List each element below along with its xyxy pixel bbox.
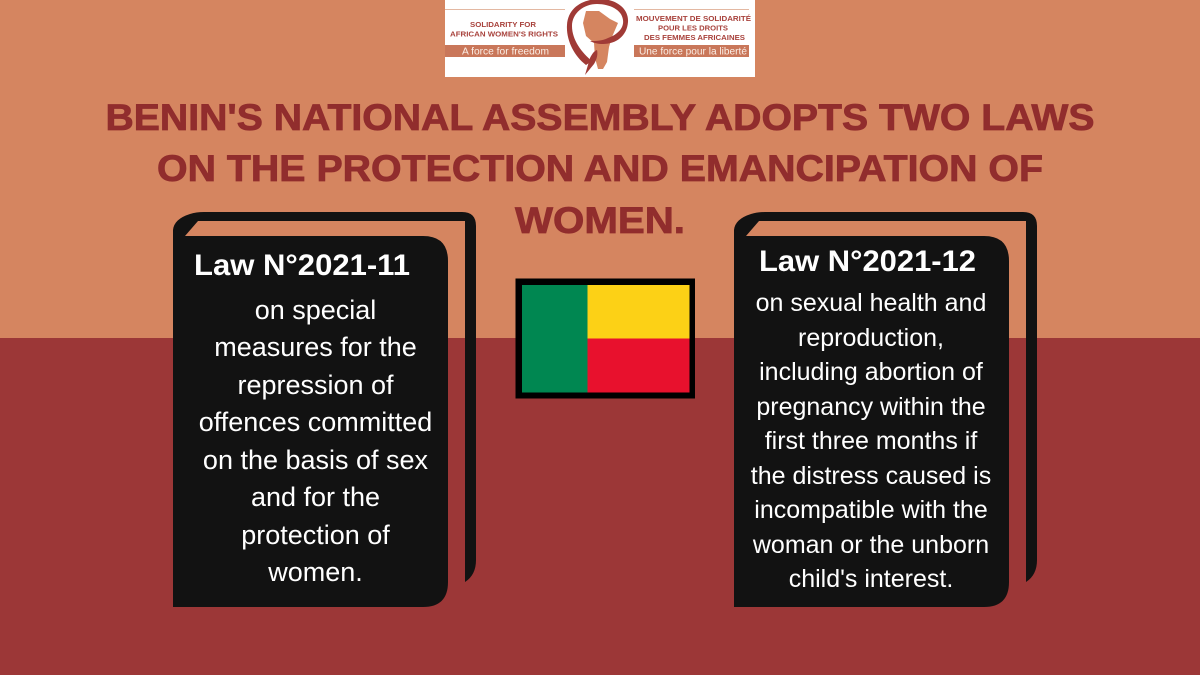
logo: Solidarity for African Women's Rights: MOUVEMENT DE SOLIDARITÉ <box>636 14 751 23</box>
text: law 11 description: women. <box>267 557 363 587</box>
text: law 12 description <box>751 289 991 593</box>
text: law 12 description: including abortion of <box>759 358 983 386</box>
text: law 11 description: repression of <box>237 370 394 400</box>
heading: Law N°2021-11: Law N°2021-11 <box>194 249 410 282</box>
text: law 11 description: measures for the <box>214 332 417 362</box>
text: law 11 description: on the basis of sex <box>203 445 429 475</box>
text: law 11 description: offences committed <box>199 407 432 437</box>
text: law 12 description: the distress caused is <box>751 462 991 490</box>
text: law 11 description: protection of <box>241 520 390 550</box>
logo: Solidarity for African Women's Rights: DES FEMMES AFRICAINES <box>644 33 745 42</box>
icon: Benin flag <box>516 278 695 398</box>
text: law 12 description: first three months if <box>765 427 977 455</box>
text: law 12 description: incompatible with the <box>754 496 988 524</box>
text: law 12 description: on sexual health and <box>756 289 986 317</box>
panel: Law 2021-11 book <box>173 212 476 607</box>
title: BENIN'S NATIONAL ASSEMBLY ADOPTS TWO LAWS <box>106 97 1094 138</box>
book cover back <box>173 212 476 582</box>
logo: Solidarity for African Women's Rights: A force for freedom <box>462 46 549 58</box>
book cover front <box>173 236 448 607</box>
text: law 12 description: woman or the unborn <box>752 531 989 559</box>
text: law 11 description: on special <box>255 295 376 325</box>
title: ON THE PROTECTION AND EMANCIPATION OF <box>157 148 1043 189</box>
text: law 12 description: child's interest. <box>789 565 953 593</box>
logo: Solidarity for African Women's Rights <box>445 0 755 77</box>
book cover back <box>734 212 1037 582</box>
text: law 12 description: reproduction, <box>798 324 944 352</box>
text: law 12 description: pregnancy within the <box>756 393 986 421</box>
logo: Solidarity for African Women's Rights: AFRICAN WOMEN'S RIGHTS <box>450 30 558 38</box>
heading: Law N°2021-12: Law N°2021-12 <box>759 245 976 278</box>
panel: Law 2021-12 book <box>734 212 1037 607</box>
text: law 11 description <box>199 295 432 587</box>
logo: Solidarity for African Women's Rights: SOLIDARITY FOR <box>470 20 537 29</box>
book cover front <box>734 236 1009 607</box>
logo: Solidarity for African Women's Rights: Une force pour la liberté <box>639 46 747 58</box>
title: WOMEN. <box>515 200 685 241</box>
logo: Solidarity for African Women's Rights: POUR LES DROITS <box>658 24 728 32</box>
text: law 11 description: and for the <box>251 482 380 512</box>
title <box>106 97 1094 241</box>
